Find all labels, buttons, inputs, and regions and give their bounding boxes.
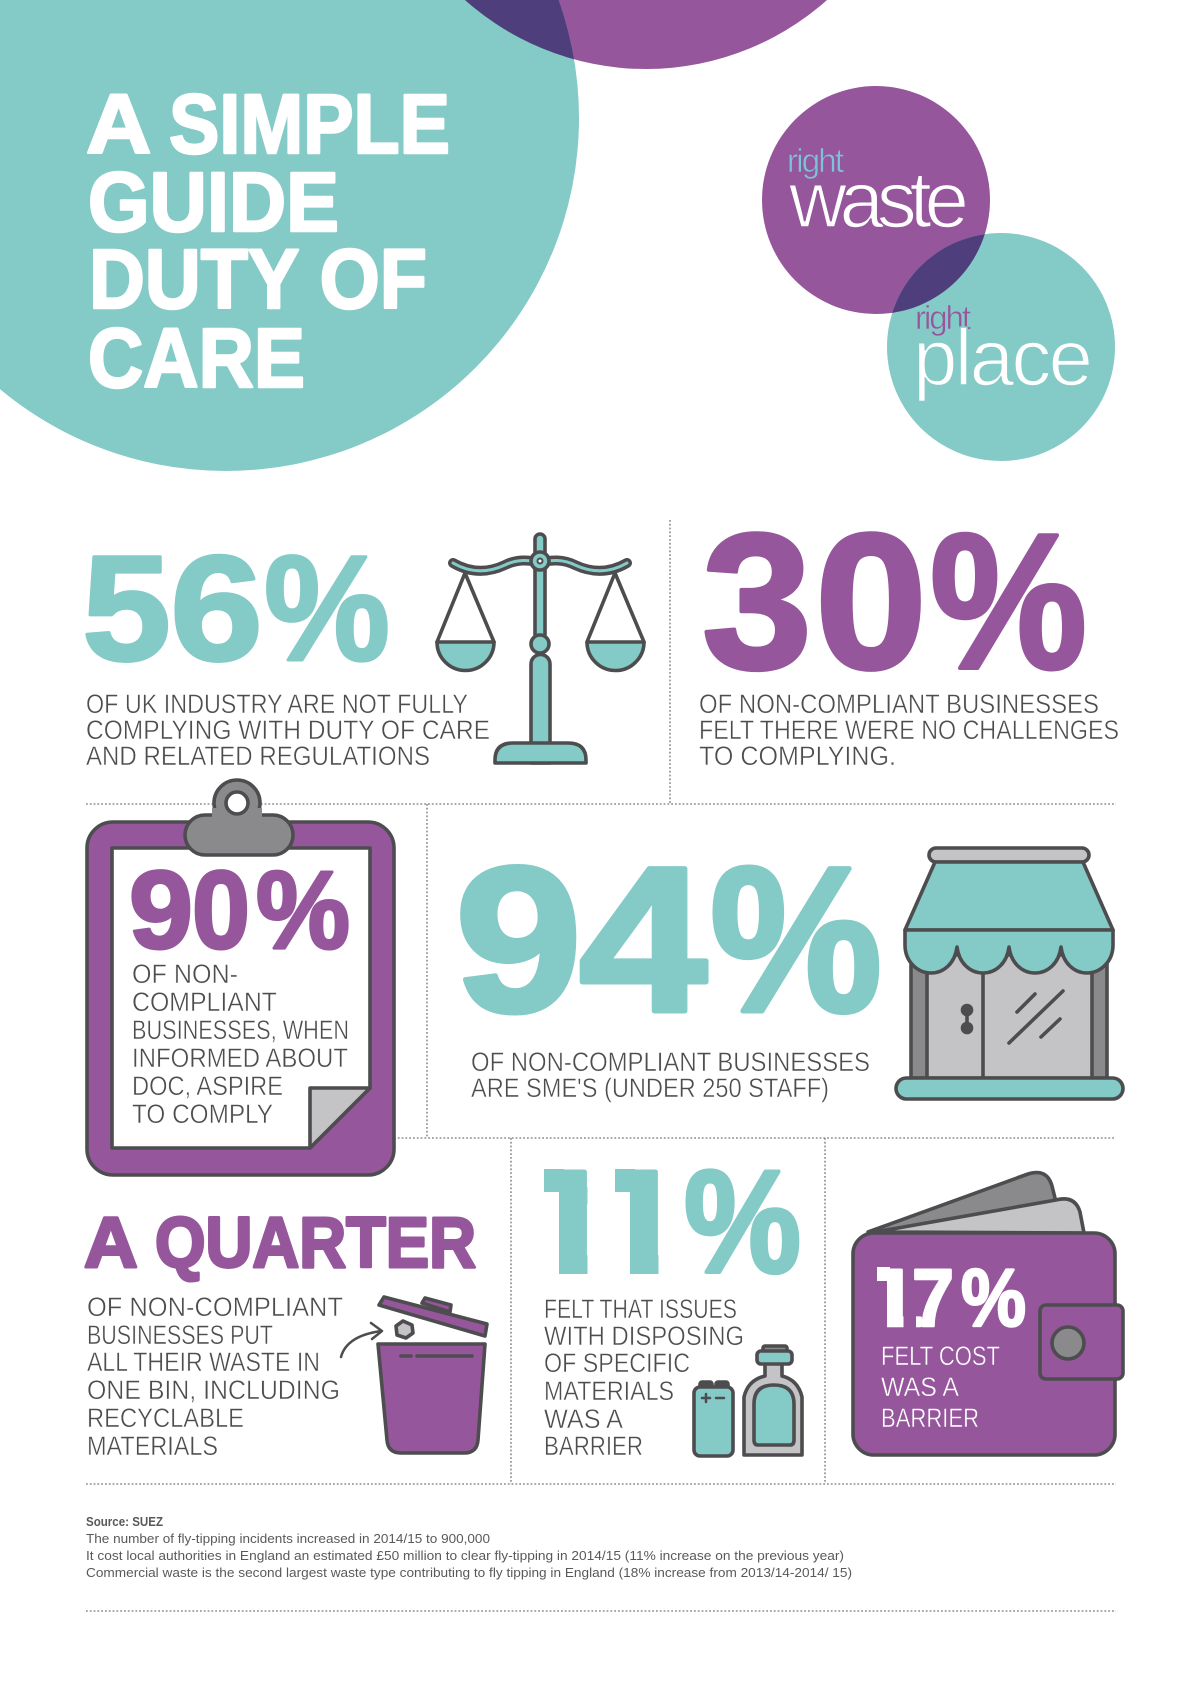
stat: 17% xyxy=(856,1253,1026,1344)
stat: 11%: 1 xyxy=(575,1140,695,1303)
text: 90% description xyxy=(132,959,349,1129)
text: 17% description: FELT COST xyxy=(881,1341,1000,1371)
stat: 90%: 0 xyxy=(192,849,250,972)
panel: 56% xyxy=(82,524,490,771)
text: 11% description: WITH DISPOSING xyxy=(544,1321,744,1351)
footer: source notes xyxy=(86,1514,852,1580)
stat: 56%: % xyxy=(264,524,390,692)
stat: 11%: % xyxy=(684,1140,801,1303)
panel: 17% wallet xyxy=(853,1172,1123,1455)
stat: 11%: 1 xyxy=(504,1140,624,1303)
stat: 90%: 9 xyxy=(129,849,193,972)
text: 56% description: OF UK INDUSTRY ARE NOT FULLY xyxy=(86,689,468,719)
icon: clipboard board xyxy=(87,822,394,1175)
stat: 17%: % xyxy=(961,1253,1026,1344)
text: 90% description: COMPLIANT xyxy=(132,987,277,1017)
panel: a quarter xyxy=(84,1204,476,1461)
text: 17% description: WAS A xyxy=(881,1372,959,1402)
text: 94% description xyxy=(471,1047,870,1103)
icon: paper sheet xyxy=(112,848,370,1148)
stat: 17%: 1 xyxy=(856,1253,924,1344)
footer: source notes: It cost local authorities in England an estimated £50 million to clear fly-tipping in 2014/15 (11% increase on the previous year) xyxy=(86,1548,844,1563)
title: GUIDE xyxy=(88,155,339,249)
stat: 17%: 7 xyxy=(912,1253,954,1344)
logo: right waste right place: right xyxy=(915,299,971,336)
panel: 94% xyxy=(455,824,882,1103)
title: DUTY OF xyxy=(89,232,427,326)
stat: 30%: % xyxy=(930,493,1087,709)
stat: 90%: % xyxy=(256,849,350,972)
text: 30% description xyxy=(699,689,1119,771)
text: 90% description: OF NON- xyxy=(132,959,238,989)
text: 30% description: TO COMPLYING. xyxy=(699,741,896,771)
text: 11% description xyxy=(544,1294,744,1461)
text: 56% description: AND RELATED REGULATIONS xyxy=(86,741,430,771)
text: 56% description: COMPLYING WITH DUTY OF CARE xyxy=(86,715,490,745)
text: a quarter description: MATERIALS xyxy=(87,1431,218,1461)
stat: 94%: 9 xyxy=(455,824,582,1055)
icon: scales xyxy=(437,534,644,763)
panel: 30% xyxy=(699,493,1119,771)
text: a quarter description: OF NON-COMPLIANT xyxy=(87,1292,343,1322)
footer: source notes: The number of fly-tipping incidents increased in 2014/15 to 900,000 xyxy=(86,1531,490,1546)
title: A xyxy=(86,77,150,171)
icon: wallet body xyxy=(853,1233,1115,1455)
stat: 94%: 4 xyxy=(579,824,707,1055)
heading: A QUARTER: A xyxy=(84,1204,136,1283)
text: 90% description: INFORMED ABOUT xyxy=(132,1043,348,1073)
title xyxy=(86,77,450,405)
text: a quarter description: RECYCLABLE xyxy=(87,1403,244,1433)
text: a quarter description: ALL THEIR WASTE IN xyxy=(87,1347,320,1377)
panel: 90% clipboard xyxy=(87,780,394,1175)
text: 56% description xyxy=(86,689,490,771)
logo: right waste right place: waste xyxy=(788,155,969,244)
text: 30% description: FELT THERE WERE NO CHALLENGES xyxy=(699,715,1119,745)
logo: right waste right place xyxy=(762,86,1115,461)
text: a quarter description: BUSINESSES PUT xyxy=(87,1320,273,1350)
text: a quarter description xyxy=(87,1292,343,1461)
title: CARE xyxy=(88,311,305,405)
footer: source notes: Source: SUEZ xyxy=(86,1514,163,1529)
text: 11% description: OF SPECIFIC xyxy=(544,1348,690,1378)
stat: 30%: 0 xyxy=(815,493,927,709)
text: 17% description: BARRIER xyxy=(881,1403,979,1433)
text: 11% description: MATERIALS xyxy=(544,1376,674,1406)
icon: waste bin with lid xyxy=(341,1297,487,1453)
stat: 94%: % xyxy=(710,824,882,1055)
stat: 56%: 5 xyxy=(82,524,171,692)
logo: right waste right place: place xyxy=(913,313,1093,402)
text: 11% description: FELT THAT ISSUES xyxy=(544,1294,737,1324)
dotted dividers xyxy=(86,520,1116,1611)
icon: shop front xyxy=(896,848,1123,1099)
logo: right waste right place: right xyxy=(787,142,844,179)
text: a quarter description: ONE BIN, INCLUDING xyxy=(87,1375,340,1405)
heading: A QUARTER: QUARTER xyxy=(155,1204,476,1283)
stat: 11% xyxy=(504,1140,801,1303)
text: 17% description xyxy=(881,1341,1000,1433)
stat: 30%: 3 xyxy=(702,493,812,709)
icon: battery xyxy=(694,1382,733,1456)
icon: wallet notes xyxy=(868,1172,1084,1233)
text: 90% description: TO COMPLY xyxy=(132,1099,273,1129)
icon: clip xyxy=(185,780,293,855)
stat: 56%: 6 xyxy=(170,524,263,692)
text: 90% description: DOC, ASPIRE xyxy=(132,1071,283,1101)
icon: bottle xyxy=(744,1346,802,1455)
footer: source notes: Commercial waste is the second largest waste type contributing to fly tipping in England (18% increase from 2013/14-2014/ 15) xyxy=(86,1565,852,1580)
header background circles xyxy=(0,0,918,471)
title: SIMPLE xyxy=(169,77,450,171)
text: 94% description: ARE SME'S (UNDER 250 STAFF) xyxy=(471,1073,829,1103)
panel: 11% xyxy=(504,1140,801,1461)
icon: paper fold xyxy=(310,1088,370,1148)
text: 30% description: OF NON-COMPLIANT BUSINESSES xyxy=(699,689,1099,719)
text: 11% description: WAS A xyxy=(544,1404,623,1434)
icon: wallet clasp xyxy=(1040,1305,1123,1379)
text: 94% description: OF NON-COMPLIANT BUSINESSES xyxy=(471,1047,870,1077)
text: 90% description: BUSINESSES, WHEN xyxy=(132,1015,349,1045)
text: 11% description: BARRIER xyxy=(544,1431,643,1461)
